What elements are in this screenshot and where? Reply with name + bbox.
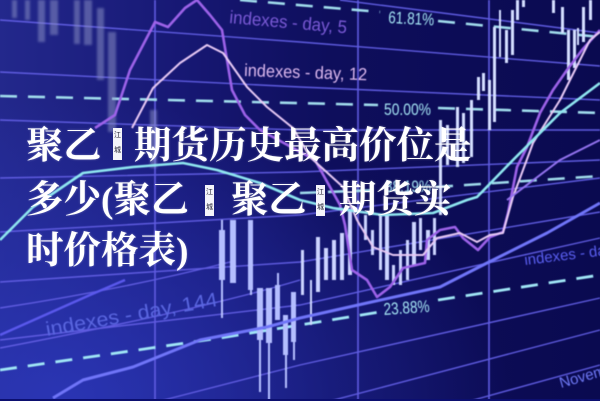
watermark box line 2a: 城 <box>206 202 213 212</box>
candlesticks: lower left <box>219 220 296 401</box>
curve: index day 5 <box>95 0 600 297</box>
watermark box line 2a <box>205 185 214 216</box>
title: 期货历史最高价位是 <box>134 126 472 167</box>
watermark box line 1 <box>113 128 122 160</box>
title: 期货实 <box>339 180 452 221</box>
title: 时价格表) <box>26 231 188 272</box>
label: indexes day 12: indexes - day, 12 <box>244 60 367 84</box>
curve: cyan moving average <box>0 83 600 240</box>
title: 多少(聚乙 <box>26 180 188 221</box>
watermark box line 2a: 江 <box>206 187 213 197</box>
title <box>26 124 472 272</box>
label: indexes day 144: indexes - day, 144 <box>44 289 219 341</box>
label: 50.00%: 50.00% <box>384 100 431 119</box>
candlesticks: rising section <box>439 0 592 215</box>
candlesticks: centre <box>301 210 436 325</box>
title: 聚乙 <box>231 180 306 221</box>
watermark box line 1: 城 <box>114 145 121 155</box>
blurred candles top left <box>12 0 157 168</box>
watermark box line 1: 江 <box>114 130 121 140</box>
title: 聚乙 <box>26 126 101 167</box>
label: indexes day 5: indexes - day, 5 <box>229 7 348 37</box>
dashed fibonacci levels <box>0 0 600 193</box>
label: 61.81%: 61.81% <box>388 8 435 29</box>
watermark box line 2b <box>316 185 325 216</box>
curve: index day 144 <box>53 203 600 398</box>
watermark box line 2b: 江 <box>317 187 324 197</box>
label: 38.19%: 38.19% <box>385 177 431 196</box>
watermark box line 2b: 城 <box>317 202 324 212</box>
curve: index day 12 <box>132 32 600 255</box>
label: 23.88%: 23.88% <box>383 297 430 319</box>
